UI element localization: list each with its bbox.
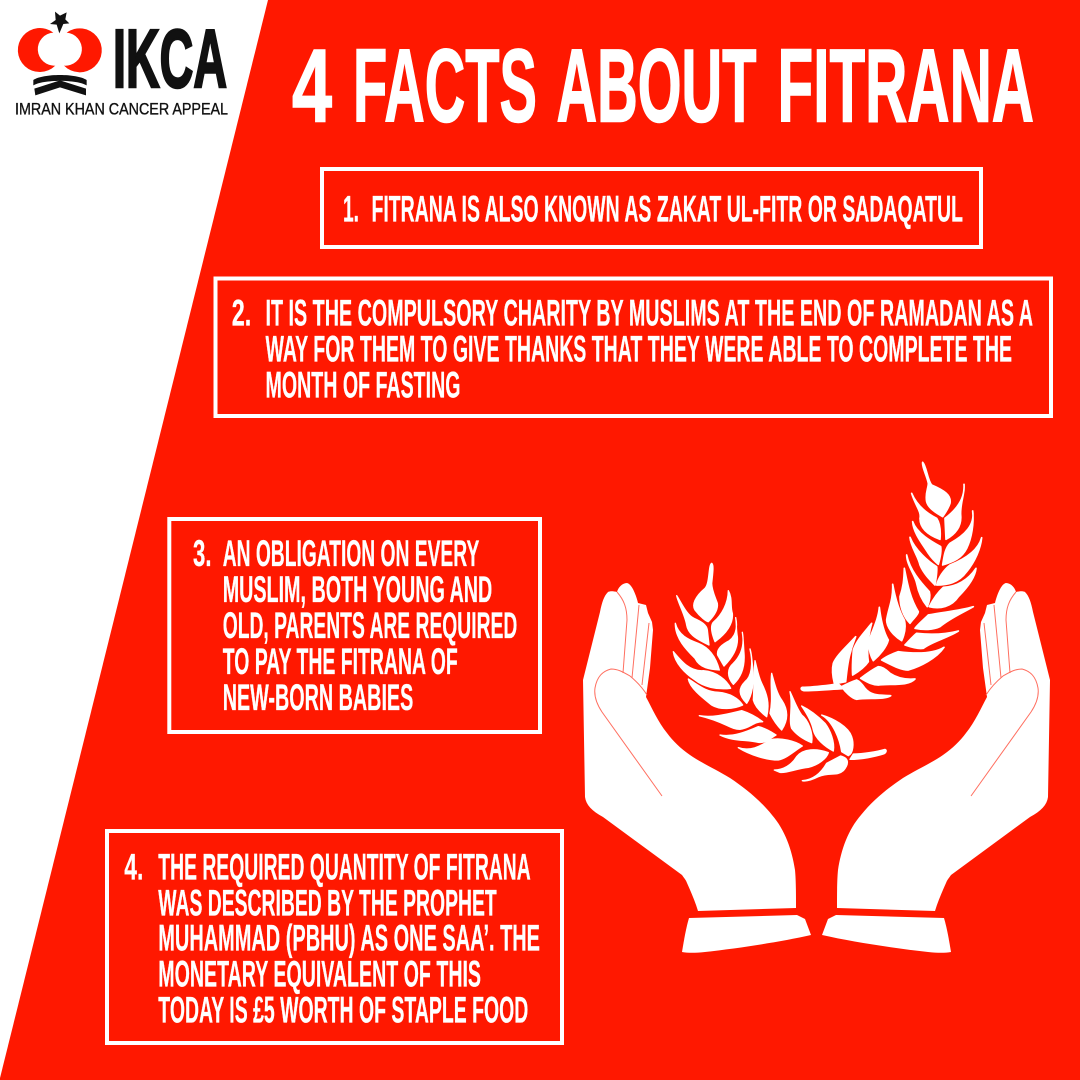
panel: fact 4: 4. [124,845,143,887]
logo wordmark: IKCA [113,12,227,105]
panel: fact 4: THE REQUIRED QUANTITY OF FITRANA [158,845,531,887]
panel: fact 4: TODAY IS £5 WORTH OF STAPLE FOOD [158,988,528,1030]
title [292,29,1034,145]
logo tagline: IMRAN KHAN CANCER APPEAL [15,100,228,118]
panel: fact 2: 2. [232,292,251,334]
panel: fact 3: NEW-BORN BABIES [223,676,413,718]
panel: fact 1 [322,169,981,247]
right cuff [822,915,951,953]
panel: fact 2 [216,278,1051,416]
title: FACTS [353,29,537,145]
panel: fact 4: MUHAMMAD (PBHU) AS ONE SAA’. THE [158,917,540,959]
title: ABOUT [556,29,756,145]
left cuff [682,915,811,953]
icon: right wheat ear [801,462,982,699]
panel: fact 4: WAS DESCRIBED BY THE PROPHET [158,881,497,923]
icon: logo emblem [18,12,102,95]
white diagonal panel [0,0,268,1078]
panel: fact 3: AN OBLIGATION ON EVERY [223,532,479,574]
title: 4 [292,29,332,145]
panel: fact 4 [107,831,562,1043]
panel: fact 3 [169,519,540,732]
logo: IKCA [15,12,228,119]
panel: fact 3: TO PAY THE FITRANA OF [223,640,458,682]
panel: fact 3: OLD, PARENTS ARE REQUIRED [223,604,517,646]
panel: fact 3: 3. [193,532,212,574]
icon: right cupped hand [822,583,1050,953]
panel: fact 1: 1. [343,188,359,230]
panel: fact 2: MONTH OF FASTING [266,364,460,406]
panel: fact 4: MONETARY EQUIVALENT OF THIS [158,953,481,995]
panel: fact 3: MUSLIM, BOTH YOUNG AND [223,568,492,610]
icon: left cupped hand [583,583,811,953]
icon: left wheat ear [673,563,886,781]
